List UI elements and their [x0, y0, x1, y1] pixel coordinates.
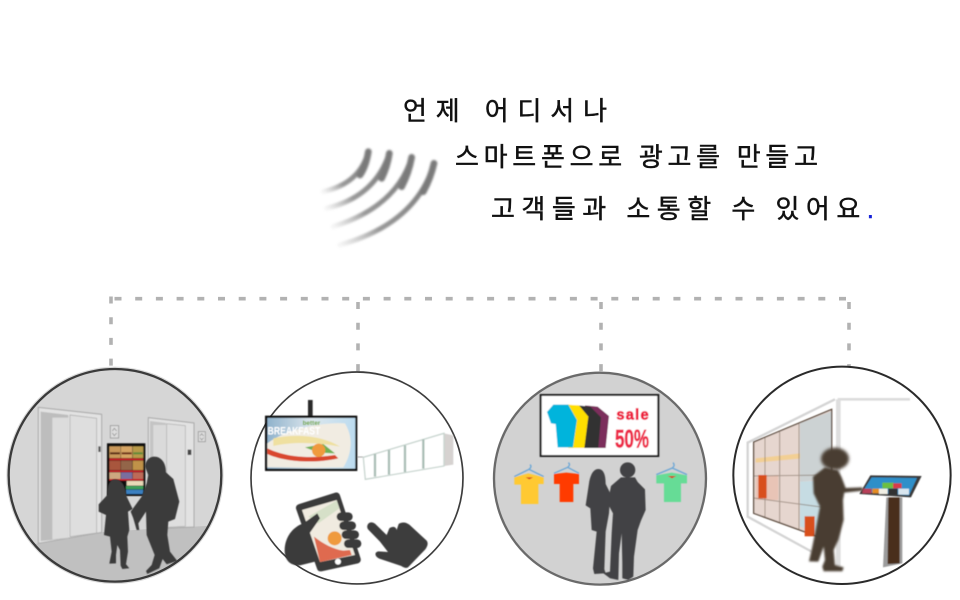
discount text: 50% — [615, 425, 649, 453]
kiosk touch screen — [859, 475, 922, 497]
wall shelves — [363, 433, 453, 479]
right elevator door — [148, 418, 194, 529]
left elevator door — [38, 407, 102, 543]
TV screen: sale ad — [541, 395, 658, 456]
panel: smartphone control — [251, 372, 463, 584]
silhouette: child — [99, 479, 133, 569]
TV screen: breakfast ad: BREAKFAST — [268, 426, 320, 438]
silhouette: couple — [586, 462, 646, 580]
holding hand — [285, 513, 320, 565]
TV screen: breakfast ad — [265, 416, 357, 471]
digital signage menu screen — [107, 443, 145, 496]
floor — [36, 526, 207, 580]
heading line: 언제 어디서나: 언제 어디서나 — [403, 96, 607, 126]
heading line: 스마트폰으로 광고를 만들고: 스마트폰으로 광고를 만들고 — [455, 142, 818, 172]
wall frame — [748, 399, 835, 552]
silhouette: adult — [131, 457, 179, 574]
panel: elevator lobby — [6, 366, 224, 584]
kiosk stand — [859, 475, 922, 567]
video wall — [754, 409, 832, 542]
phone held in hand — [285, 493, 361, 571]
dashed connector lines — [111, 296, 849, 372]
panel: video wall and kiosk — [733, 367, 951, 584]
icon: signal waves — [323, 152, 434, 245]
ceiling mount — [308, 400, 313, 416]
TV screen: breakfast ad: better — [303, 420, 321, 427]
panel: clothing store — [494, 373, 706, 585]
cable — [357, 456, 364, 458]
red shirt — [554, 463, 579, 502]
yellow shirt — [514, 465, 544, 504]
icon: pointing hand — [367, 522, 428, 568]
silhouette: person at kiosk — [809, 448, 863, 571]
green shirt — [656, 463, 687, 502]
call buttons — [110, 426, 205, 442]
sale text: sale — [616, 407, 649, 423]
hanging shirts — [514, 463, 687, 504]
heading line: 고객들과 소통할 수 있어요: 고객들과 소통할 수 있어요. — [491, 194, 874, 224]
